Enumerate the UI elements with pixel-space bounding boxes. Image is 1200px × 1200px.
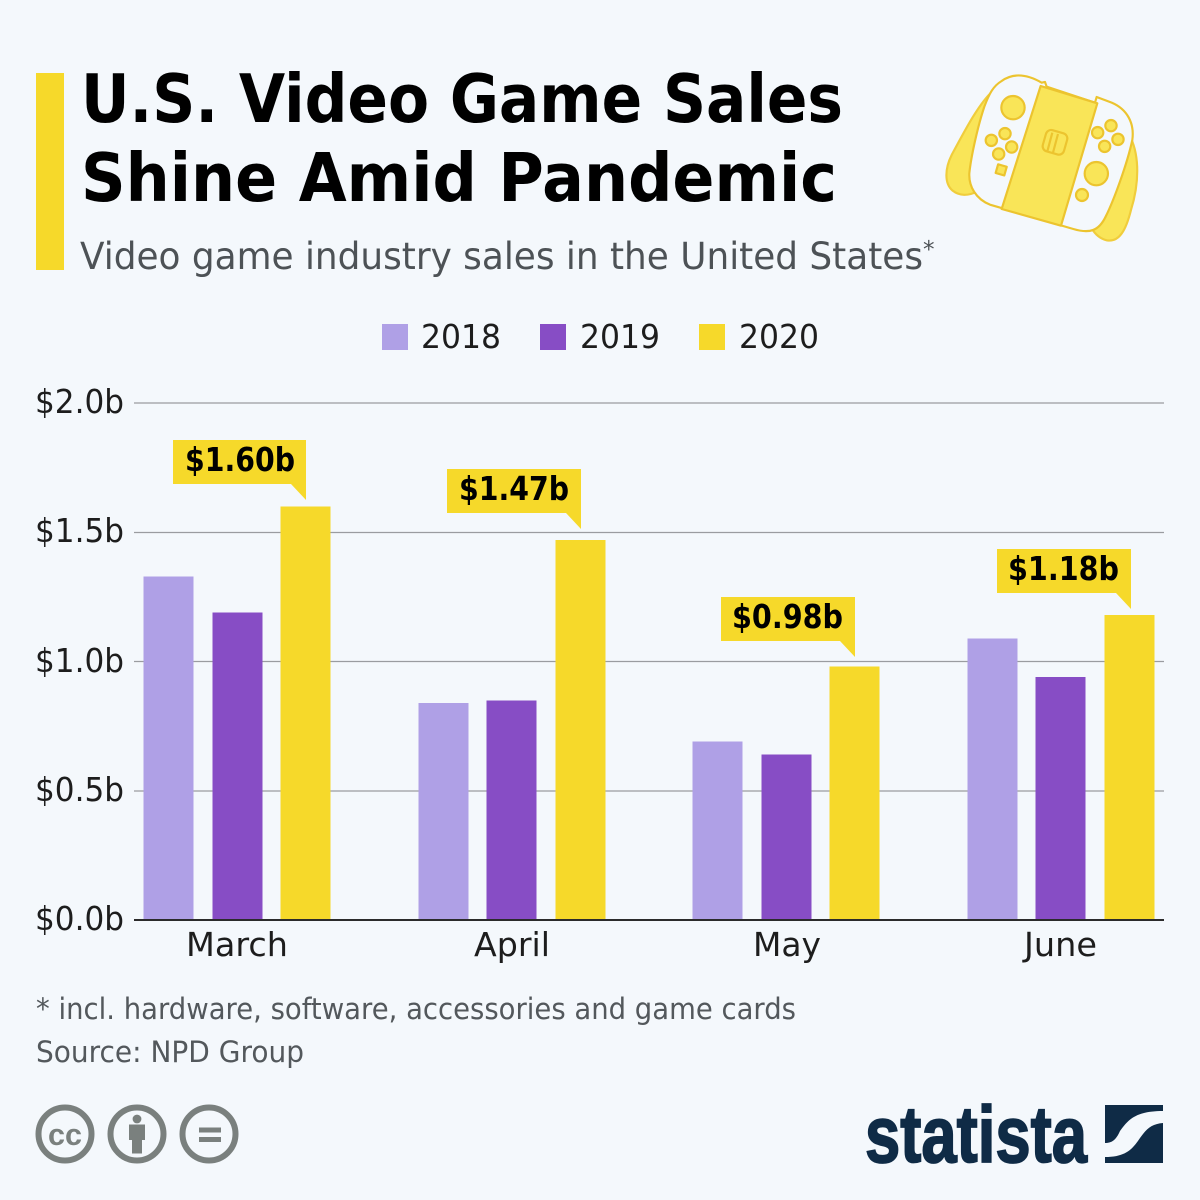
x axis labels <box>186 925 1097 964</box>
x axis labels: March <box>186 925 288 964</box>
y axis gridlines and labels: $1.0b <box>35 641 124 680</box>
title accent bar <box>36 73 64 270</box>
icon: cc <box>38 1108 92 1160</box>
subtitle: * <box>923 237 934 263</box>
statista wordmark: statista <box>865 1090 1087 1179</box>
callout: March $1.60b: $1.60b <box>185 440 295 479</box>
icon: creative commons licence <box>38 1108 236 1160</box>
callout: May $0.98b: $0.98b <box>732 597 843 636</box>
subtitle: Video game industry sales in the United States <box>80 235 923 278</box>
title: U.S. Video Game Sales <box>81 60 843 138</box>
legend <box>382 317 819 356</box>
bars: May <box>692 666 880 920</box>
legend item: 2019: 2019 <box>580 317 660 356</box>
bars: March <box>144 506 330 920</box>
callout: June $1.18b: $1.18b <box>1008 549 1119 588</box>
bar chart <box>134 506 1164 920</box>
y axis gridlines and labels <box>35 382 1164 938</box>
x axis line <box>134 919 1164 921</box>
y axis gridlines and labels: $1.5b <box>35 511 124 550</box>
y axis gridlines and labels: $0.5b <box>35 770 124 809</box>
footnote and source <box>36 992 796 1069</box>
footnote and source: Source: NPD Group <box>36 1035 304 1069</box>
legend item: 2020: 2020 <box>739 317 819 356</box>
y axis gridlines and labels: $0.0b <box>35 899 124 938</box>
icon: cc: cc <box>48 1117 82 1152</box>
bars: April <box>418 540 606 920</box>
icon: no derivatives <box>182 1108 236 1160</box>
legend item: 2019 <box>540 317 660 356</box>
y axis gridlines and labels: $2.0b <box>35 382 124 421</box>
callout: March $1.60b <box>173 440 306 500</box>
callout: May $0.98b <box>721 597 855 657</box>
icon: game controller <box>946 75 1137 241</box>
footnote and source: * incl. hardware, software, accessories and game cards <box>36 992 796 1026</box>
statista mark <box>1105 1105 1163 1163</box>
legend item: 2018 <box>382 317 501 356</box>
x axis labels: May <box>753 925 821 964</box>
callout: April $1.47b: $1.47b <box>459 469 569 508</box>
title <box>81 60 843 217</box>
callout: June $1.18b <box>997 549 1131 609</box>
x axis labels: June <box>1022 925 1097 964</box>
x axis labels: April <box>474 925 550 964</box>
legend item: 2020 <box>699 317 819 356</box>
title: Shine Amid Pandemic <box>81 139 837 217</box>
callout: April $1.47b <box>447 469 581 529</box>
legend item: 2018: 2018 <box>421 317 501 356</box>
icon: attribution <box>110 1108 164 1160</box>
bars: June <box>968 615 1154 920</box>
statista logo <box>865 1090 1163 1179</box>
